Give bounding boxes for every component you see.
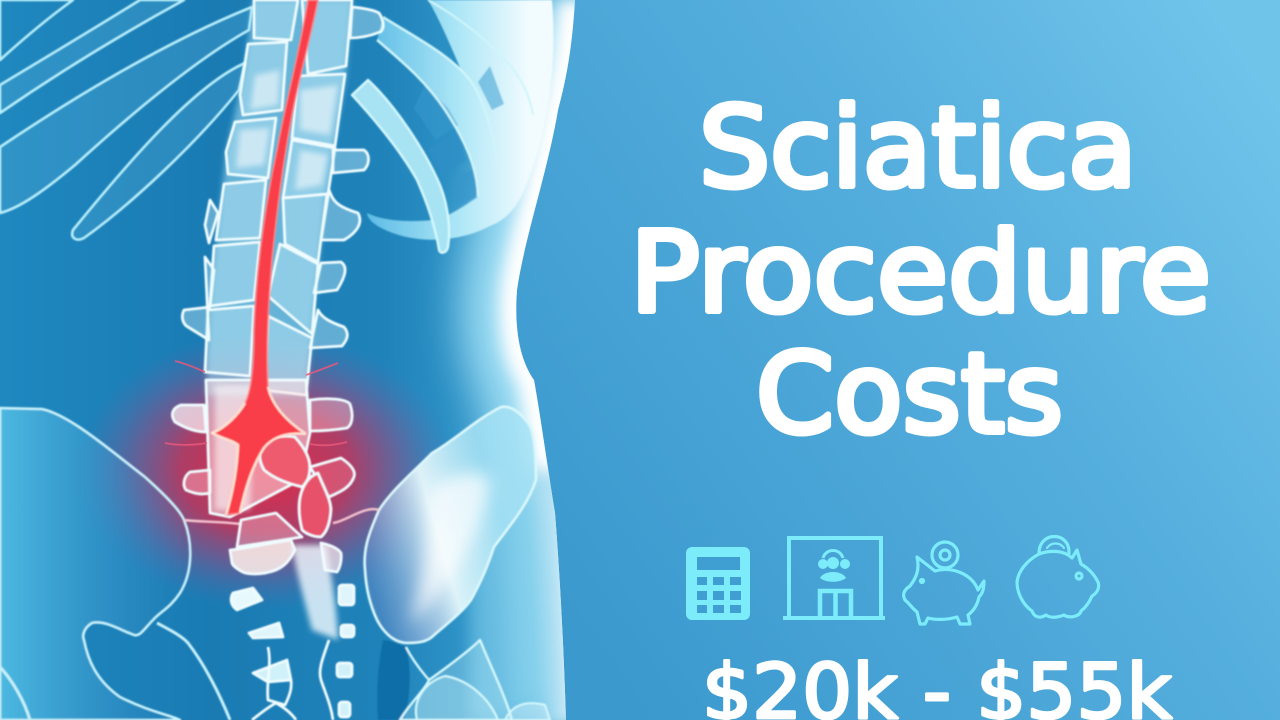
sciatic nerve [212,0,318,515]
nerve branches [165,361,347,445]
sacral dark gap [377,640,410,720]
lower left arc [0,667,30,720]
icon: piggy bank [1017,536,1099,617]
red oval [260,436,310,487]
right ribs [352,0,553,253]
left ilium [0,408,190,720]
right transverse processes [350,7,383,38]
left ribs [0,0,252,240]
sacrum and lower right bones [400,640,512,720]
spine vertebrae [172,0,383,720]
ilium highlight [410,473,490,625]
icon: calculator [686,547,750,620]
left ilium lower lobe [157,623,230,720]
icon: piggy bank with coin [904,542,984,624]
lower processes [231,588,262,610]
spine highlights [215,70,338,510]
lower trapezoid [237,513,302,547]
title line: Procedure: Procedure [630,209,1211,338]
title [630,84,1211,459]
upper column [254,0,298,40]
pelvic crest links [184,509,379,524]
icon: clinic building [783,538,885,618]
title line: Sciatica: Sciatica [699,84,1137,213]
title line: Costs: Costs [756,330,1063,459]
lumbar block [206,380,310,517]
lower white disc [230,540,295,574]
pelvis [0,407,550,720]
red loop [299,473,331,537]
pain glow [76,330,456,610]
left transverse processes [205,200,218,243]
spine column backing [206,0,352,395]
sacral column glow [292,545,338,640]
right ilium [365,407,536,643]
nerve junction outlines [212,387,306,515]
body silhouette [0,0,600,720]
